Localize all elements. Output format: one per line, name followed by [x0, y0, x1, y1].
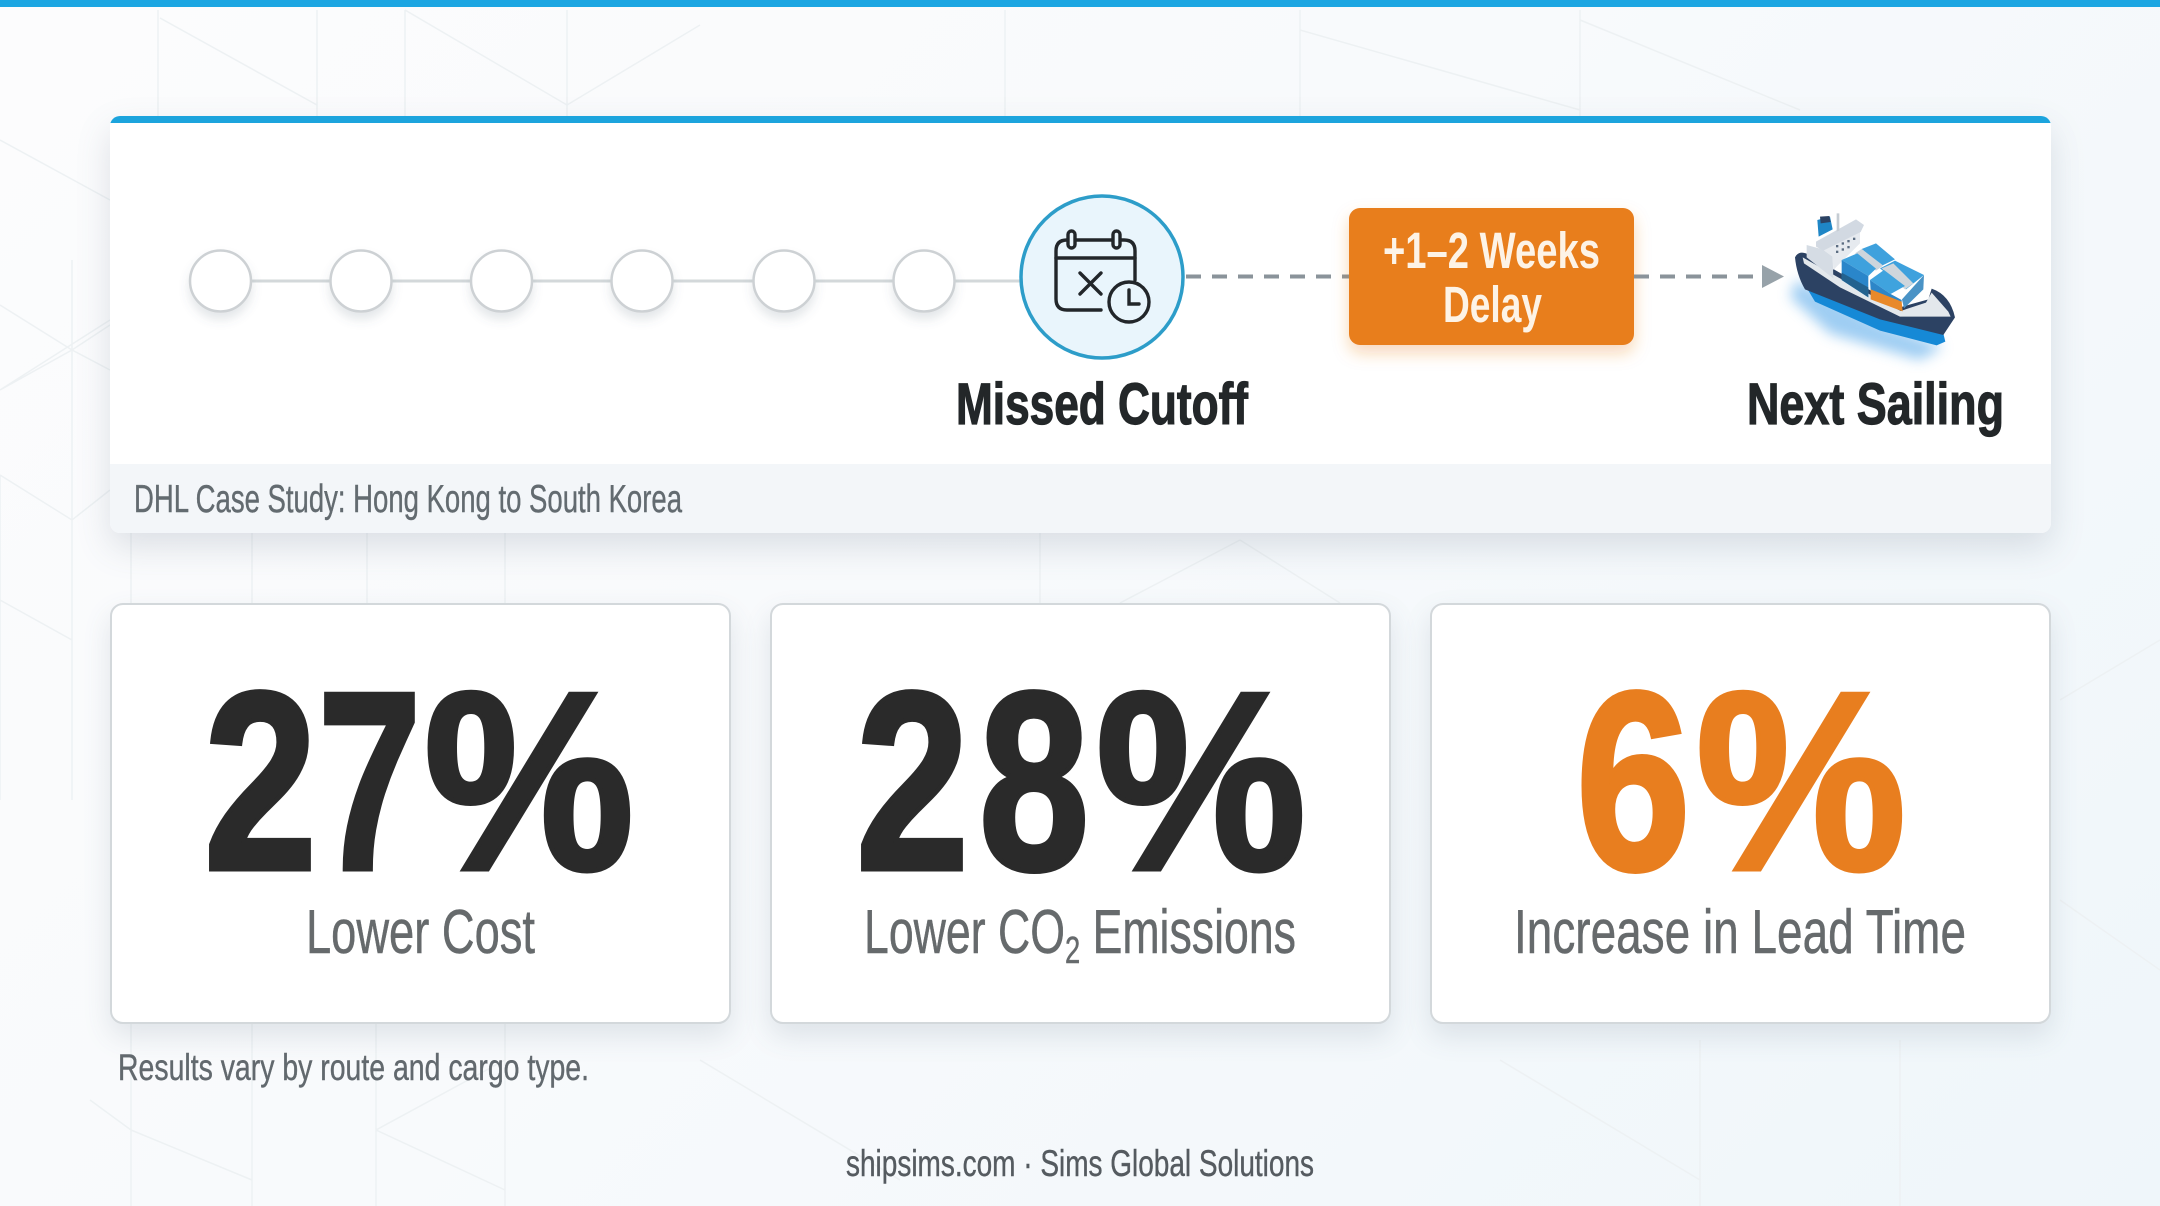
- label: increase in lead time: Increase in Lead Time: [1514, 898, 1966, 967]
- stat: 27%: [204, 639, 634, 923]
- panel accent bar: [110, 116, 2051, 123]
- stat: 28%: %: [1096, 639, 1306, 923]
- panel: lower cost card: [110, 603, 731, 1024]
- callout: delay badge: Delay: [1443, 276, 1542, 333]
- label: lower CO2 emissions: Lower CO: [864, 898, 1143, 967]
- stat: 27%: 7: [318, 639, 421, 923]
- dashed arrow to delay: [1186, 274, 1349, 278]
- icon: container ship: [1790, 213, 1955, 360]
- label: lower CO2 emissions: Emissions: [1080, 898, 1296, 967]
- stat: 28%: 8: [979, 639, 1089, 923]
- caption: case study: DHL Case Study: Hong Kong to South Korea: [134, 478, 682, 521]
- callout: delay badge: [1349, 208, 1634, 345]
- label: next sailing: Next Sailing: [1747, 372, 2004, 437]
- milestone line and circles: [190, 250, 1022, 312]
- stat: 6%: 6: [1576, 639, 1690, 923]
- arrow to next sailing: [1634, 265, 1784, 288]
- panel: lead time card: [1430, 603, 2051, 1024]
- panel: timeline: [110, 116, 2051, 533]
- label: lower cost: Lower Cost: [306, 898, 535, 967]
- stat: 28%: [856, 639, 1306, 923]
- stat: 28%: 2: [856, 639, 969, 923]
- stat: 27%: %: [424, 639, 634, 923]
- label: lower CO2 emissions: 2: [1065, 930, 1080, 972]
- panel: lower emissions card: [770, 603, 1391, 1024]
- note: results vary: Results vary by route and cargo type.: [118, 1047, 589, 1088]
- case study caption strip: [110, 464, 2051, 533]
- stat: 6%: %: [1696, 639, 1906, 923]
- stat: 6%: [1576, 639, 1906, 923]
- callout: delay badge: +1–2 Weeks: [1383, 222, 1600, 279]
- footer: shipsims.com · Sims Global Solutions: [846, 1143, 1314, 1184]
- icon: missed cutoff calendar: [1021, 196, 1183, 358]
- top accent bar: [0, 0, 2160, 7]
- stat: 27%: 2: [204, 639, 317, 923]
- label: missed cutoff: Missed Cutoff: [956, 372, 1249, 437]
